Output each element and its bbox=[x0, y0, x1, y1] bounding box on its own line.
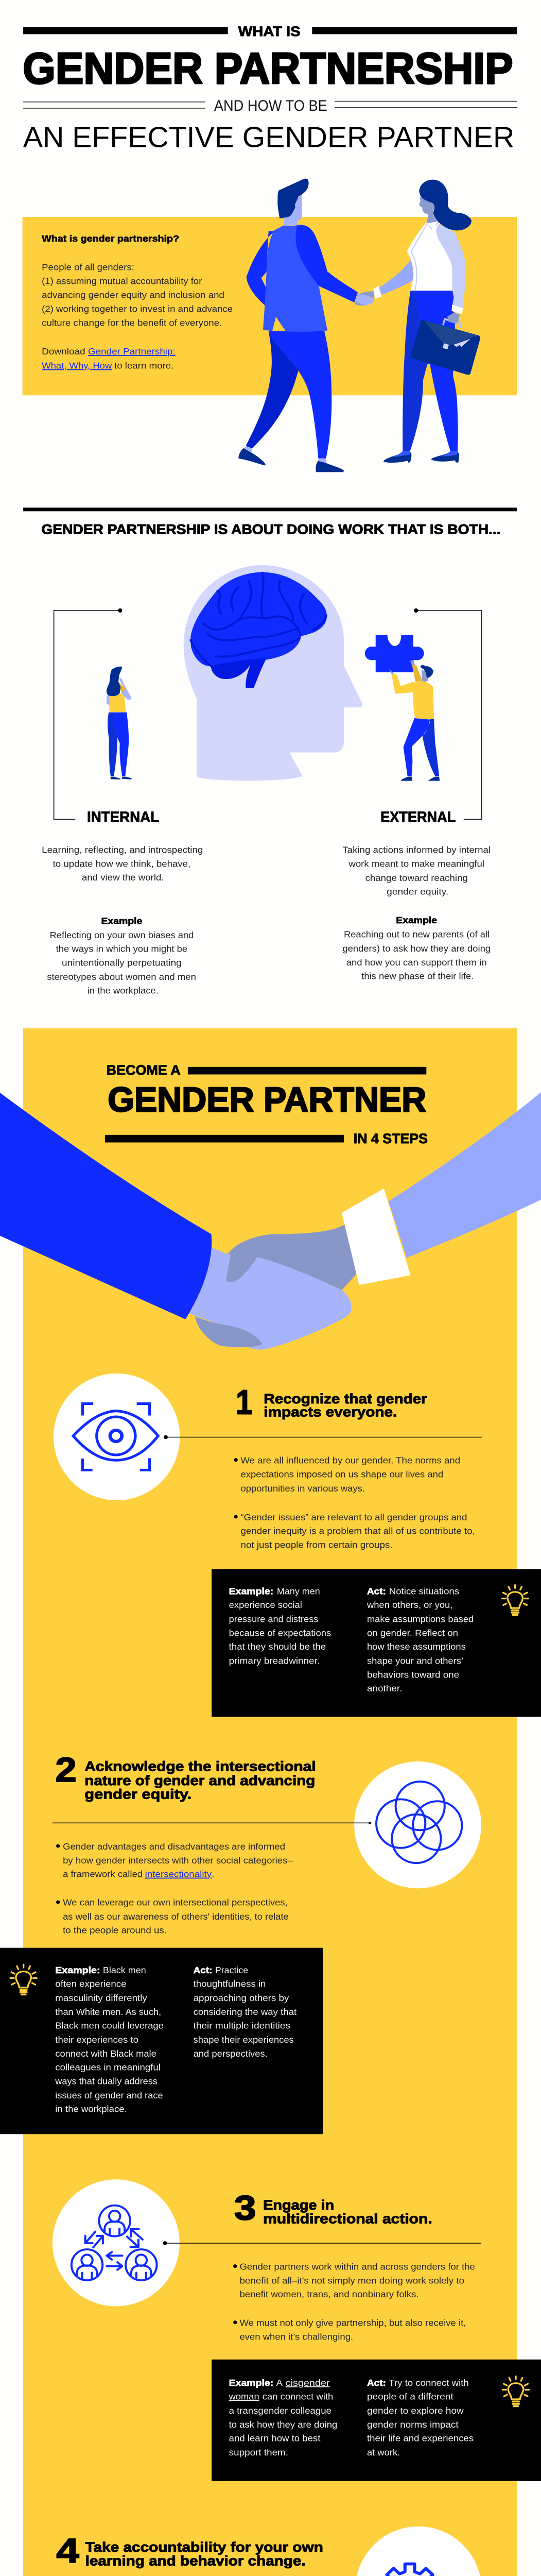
step 3 bullets: even when it’s challenging. bbox=[239, 2331, 353, 2342]
step 1 heading bbox=[264, 1391, 427, 1419]
external example: this new phase of their life. bbox=[361, 971, 474, 981]
illustration: large handshake bbox=[0, 1092, 541, 1350]
number 3: 3 bbox=[234, 2189, 256, 2227]
step 2 bbox=[53, 1751, 481, 1936]
example text: than White men. As such, bbox=[55, 2006, 161, 2017]
definition text: culture change for the benefit of everyone. bbox=[42, 317, 222, 328]
definition text: (1) assuming mutual accountability for bbox=[42, 276, 202, 286]
section title: become a gender partner in 4 steps: BECOME A bbox=[107, 1062, 181, 1078]
section title: become a gender partner in 4 steps bbox=[105, 1062, 428, 1146]
example text: ways that dually address bbox=[55, 2076, 158, 2086]
external description: work meant to make meaningful bbox=[348, 858, 484, 869]
example text: Black men bbox=[103, 1964, 146, 1975]
example text: cisgender bbox=[286, 2377, 330, 2388]
step 1 heading: impacts everyone. bbox=[264, 1404, 397, 1419]
act text: Notice situations bbox=[389, 1586, 459, 1596]
example text bbox=[229, 1586, 331, 1666]
example text: that they should be the bbox=[229, 1641, 326, 1652]
panel heading: What is gender partnership? bbox=[42, 233, 179, 244]
example text: because of expectations bbox=[229, 1628, 331, 1638]
act text: gender to explore how bbox=[367, 2405, 464, 2416]
step 1 bullets: not just people from certain groups. bbox=[240, 1539, 393, 1550]
internal example bbox=[47, 916, 196, 996]
step 2 heading bbox=[84, 1758, 316, 1802]
act text: on gender. Reflect on bbox=[367, 1628, 458, 1638]
right sleeve bbox=[389, 1092, 541, 1258]
definition text: advancing gender equity and inclusion and bbox=[42, 290, 224, 300]
number 2: 2 bbox=[55, 1751, 77, 1789]
example text: in the workplace. bbox=[55, 2104, 127, 2114]
figure: woman bbox=[379, 180, 480, 463]
definition text bbox=[42, 262, 233, 328]
icon: people exchanging arrows bbox=[53, 2179, 180, 2306]
example text: and learn how to best bbox=[229, 2433, 320, 2443]
icon: lightbulb bbox=[503, 2376, 529, 2406]
lower fingers bbox=[195, 1316, 263, 1347]
icon: lightbulb bbox=[10, 1964, 37, 1994]
example text: Black men could leverage bbox=[55, 2020, 164, 2030]
external description: Taking actions informed by internal bbox=[342, 844, 491, 855]
internal description: and view the world. bbox=[82, 872, 164, 883]
title: gender partner: GENDER PARTNER bbox=[108, 1080, 426, 1119]
step 2 bullets: to the people around us. bbox=[63, 1925, 167, 1936]
example text: woman bbox=[229, 2391, 259, 2401]
act text: Act: bbox=[194, 1964, 212, 1975]
download link text: Download bbox=[42, 346, 85, 357]
example text: issues of gender and race bbox=[55, 2090, 163, 2100]
act text bbox=[194, 1964, 296, 2059]
step 1 heading: Recognize that gender bbox=[264, 1391, 427, 1406]
internal bracket bbox=[54, 608, 122, 820]
section title: become a gender partner in 4 steps: IN 4 STEPS bbox=[354, 1130, 428, 1146]
example text: connect with Black male bbox=[55, 2048, 156, 2059]
internal example: unintentionally perpetuating bbox=[62, 957, 182, 968]
panel: what is gender partnership bbox=[23, 217, 517, 395]
step 1 bullets: opportunities in various ways. bbox=[240, 1483, 365, 1494]
external heading: EXTERNAL bbox=[380, 809, 456, 826]
step 2 bullets: intersectionality bbox=[145, 1869, 212, 1879]
act text: Act: bbox=[367, 2377, 386, 2388]
act text: considering the way that bbox=[194, 2006, 296, 2017]
icon: gear with arrow bbox=[355, 2527, 482, 2576]
example text: Example: bbox=[229, 1586, 273, 1596]
internal example: the ways in which you might be bbox=[56, 943, 187, 954]
act text: at work. bbox=[367, 2447, 400, 2458]
download link text: to learn more. bbox=[114, 360, 173, 371]
example text: a transgender colleague bbox=[229, 2405, 331, 2416]
icon: brain bbox=[190, 572, 327, 688]
act text: make assumptions based bbox=[367, 1614, 474, 1624]
step 3 heading: Engage in bbox=[263, 2197, 334, 2213]
step 2 heading: nature of gender and advancing bbox=[84, 1773, 315, 1788]
internal example: in the workplace. bbox=[88, 985, 159, 996]
example text: Example: bbox=[229, 2377, 273, 2388]
icon: puzzle piece bbox=[365, 635, 424, 672]
step 4 heading and icon bbox=[54, 2527, 482, 2576]
example text: Many men bbox=[277, 1586, 320, 1596]
example text bbox=[55, 1964, 164, 2114]
step 2 bullets: Gender advantages and disadvantages are informed bbox=[63, 1841, 285, 1852]
act text: their life and experiences bbox=[367, 2433, 474, 2443]
act text: shape your and others’ bbox=[367, 1655, 463, 1666]
external example bbox=[342, 915, 491, 981]
illustration: man and woman shaking hands bbox=[238, 179, 480, 472]
example text: to ask how they are doing bbox=[229, 2419, 337, 2430]
step 3 bullets: benefit women, trans, and nonbinary folks. bbox=[239, 2289, 419, 2299]
external description: change toward reaching bbox=[365, 872, 468, 883]
number 1: 1 bbox=[236, 1383, 252, 1421]
external example: Reaching out to new parents (of all bbox=[344, 929, 490, 939]
act text: shape their experiences bbox=[194, 2034, 294, 2045]
upper hand bbox=[225, 1224, 356, 1290]
example text: can connect with bbox=[263, 2391, 333, 2401]
title: an effective gender partner: AN EFFECTIVE GENDER PARTNER bbox=[23, 122, 514, 154]
act text: how these assumptions bbox=[367, 1641, 466, 1652]
example text: support them. bbox=[229, 2447, 288, 2458]
step 2 heading: Acknowledge the intersectional bbox=[84, 1758, 316, 1774]
step 3 bullets: benefit of all–it's not simply men doing work solely to bbox=[239, 2275, 464, 2285]
icon: head silhouette bbox=[184, 565, 362, 781]
step 1 bullets: “Gender issues” are relevant to all gender groups and bbox=[240, 1512, 467, 1522]
internal example: stereotypes about women and men bbox=[47, 971, 196, 982]
internal example: Reflecting on your own biases and bbox=[50, 929, 194, 940]
icon: briefcase bbox=[411, 320, 480, 375]
external description: gender equity. bbox=[387, 886, 448, 897]
act text: gender norms impact bbox=[367, 2419, 459, 2430]
section heading: GENDER PARTNERSHIP IS ABOUT DOING WORK THAT IS BOTH... bbox=[41, 521, 501, 537]
step 1 bullets bbox=[234, 1455, 475, 1550]
step 2 bullets: a framework called bbox=[63, 1869, 143, 1879]
definition text: People of all genders: bbox=[42, 262, 134, 272]
internal description bbox=[42, 844, 203, 883]
act text: and perspectives. bbox=[194, 2048, 268, 2059]
section: work that is both internal and external bbox=[23, 507, 517, 996]
step 4 heading bbox=[85, 2539, 323, 2569]
example text: A bbox=[276, 2377, 283, 2388]
icon: lightbulb bbox=[502, 1585, 528, 1615]
step 1 bullets: We are all influenced by our gender. The norms and bbox=[240, 1455, 460, 1466]
example text: often experience bbox=[55, 1978, 126, 1989]
panel: become a gender partner yellow background bbox=[23, 1028, 517, 2576]
step 1 example and act panel bbox=[212, 1569, 541, 1717]
act text: approaching others by bbox=[194, 1992, 289, 2003]
step 3 heading: multidirectional action. bbox=[263, 2211, 432, 2227]
step 4 heading: Take accountability for your own bbox=[85, 2539, 323, 2555]
example text: their experiences to bbox=[55, 2034, 138, 2045]
act text: Act: bbox=[367, 1586, 386, 1596]
number 4: 4 bbox=[56, 2532, 79, 2570]
step 2 bullets: We can leverage our own intersectional perspectives, bbox=[63, 1897, 288, 1907]
act text: people of a different bbox=[367, 2391, 453, 2401]
blue sleeve bbox=[0, 1093, 212, 1319]
step 1 bullets: expectations imposed on us shape our lives and bbox=[240, 1469, 443, 1479]
step 3 bbox=[53, 2179, 481, 2342]
example text: masculinity differently bbox=[55, 1992, 148, 2003]
act text bbox=[367, 2377, 474, 2458]
internal description: Learning, reflecting, and introspecting bbox=[42, 844, 203, 855]
internal example: Example bbox=[101, 916, 142, 926]
act text: another. bbox=[367, 1683, 402, 1693]
figure: woman thinking bbox=[107, 667, 132, 779]
act text: behaviors toward one bbox=[367, 1669, 459, 1680]
figure: man bbox=[238, 179, 358, 472]
step 4 heading: learning and behavior change. bbox=[85, 2553, 306, 2569]
act text: thoughtfulness in bbox=[194, 1978, 266, 1989]
internal description: to update how we think, behave, bbox=[53, 858, 190, 869]
title: what is: WHAT IS bbox=[238, 24, 301, 39]
act text: when others, or you, bbox=[367, 1600, 452, 1610]
example text bbox=[229, 2377, 337, 2458]
example text: Example: bbox=[55, 1964, 100, 1975]
step 2 bullets: by how gender intersects with other social categories– bbox=[63, 1855, 293, 1866]
step 2 example and act panel bbox=[0, 1948, 323, 2134]
title: and how to be: AND HOW TO BE bbox=[214, 98, 327, 114]
download link text: What, Why, How bbox=[42, 360, 112, 371]
step 3 heading bbox=[263, 2197, 432, 2227]
step 2 heading: gender equity. bbox=[84, 1786, 191, 1802]
step 2 bullets: . bbox=[212, 1869, 214, 1879]
external description bbox=[342, 844, 491, 897]
example text: pressure and distress bbox=[229, 1614, 318, 1624]
step 3 example and act panel bbox=[212, 2360, 541, 2481]
act text bbox=[367, 1586, 474, 1693]
example text: experience social bbox=[229, 1600, 302, 1610]
lower hand bbox=[189, 1247, 352, 1350]
step 3 bullets: Gender partners work within and across genders for the bbox=[239, 2261, 475, 2272]
step 2 bullets: as well as our awareness of others' identities, to relate bbox=[63, 1911, 289, 1922]
step 3 bullets bbox=[233, 2261, 475, 2342]
act text: Practice bbox=[215, 1964, 248, 1975]
external example: Example bbox=[396, 915, 437, 925]
example text: colleagues in meaningful bbox=[55, 2062, 161, 2072]
download link text: Gender Partnership: bbox=[88, 346, 176, 357]
download link text bbox=[42, 346, 176, 371]
title block bbox=[23, 24, 517, 154]
step 2 bullets bbox=[56, 1841, 293, 1936]
step 1 bbox=[54, 1374, 482, 1550]
external example: genders) to ask how they are doing bbox=[342, 943, 491, 954]
icon: eye in white circle bbox=[54, 1374, 180, 1500]
step 1 bullets: gender inequity is a problem that all of us contribute to, bbox=[240, 1526, 475, 1536]
external bracket bbox=[414, 608, 482, 820]
internal heading: INTERNAL bbox=[87, 809, 159, 826]
act text: their multiple identities bbox=[194, 2020, 290, 2030]
step 3 bullets: We must not only give partnership, but also receive it, bbox=[239, 2317, 466, 2328]
white cuff bbox=[342, 1189, 410, 1285]
act text: Try to connect with bbox=[389, 2377, 469, 2388]
definition text: (2) working together to invest in and advance bbox=[42, 303, 233, 314]
icon: overlapping circles bbox=[354, 1761, 481, 1888]
external example: and how you can support them in bbox=[346, 957, 487, 968]
example text: primary breadwinner. bbox=[229, 1655, 320, 1666]
handshake hands bbox=[355, 286, 382, 306]
figure: man lifting puzzle piece bbox=[389, 660, 440, 781]
